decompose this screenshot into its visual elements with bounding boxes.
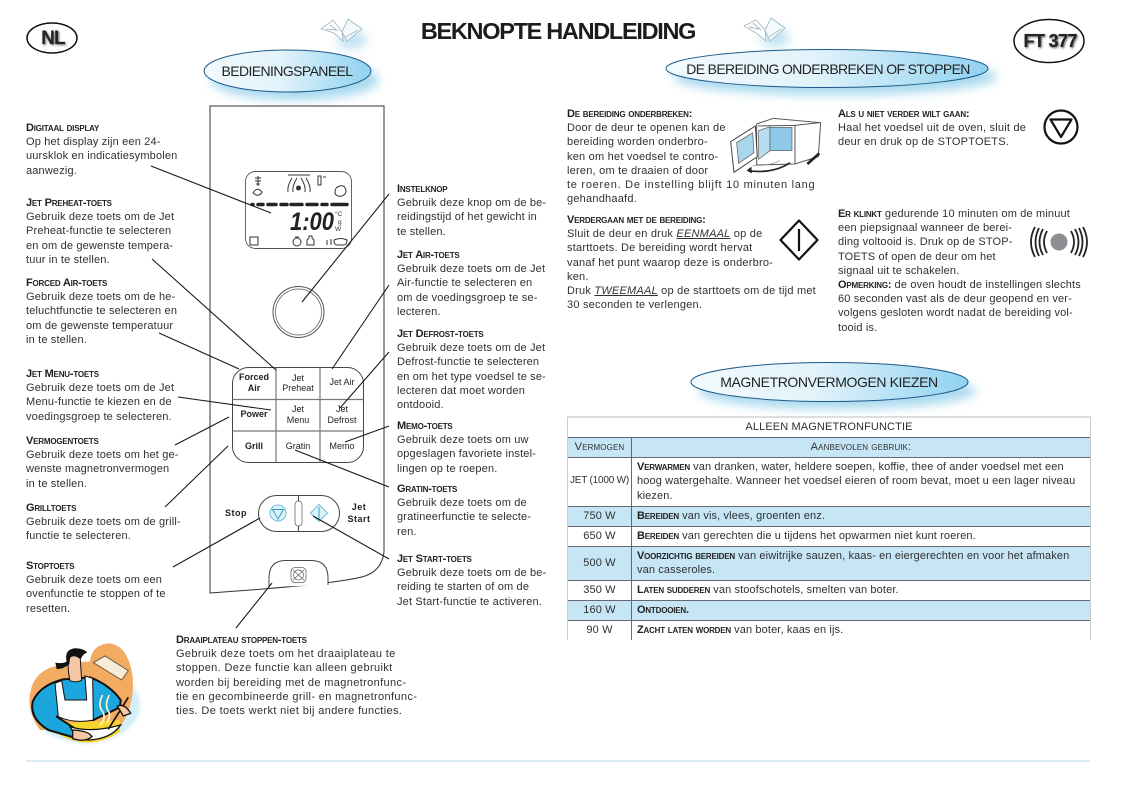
button grid: Memo: [329, 441, 355, 451]
text: jet preheat: Gebruik deze toets om de Jet: [26, 211, 174, 223]
text: de bereiding onderbreken: De bereiding onderbreken:: [567, 108, 692, 120]
text: er klinkt: signaal uit te schakelen.: [838, 265, 959, 277]
text: grill: functie te selecteren.: [26, 530, 131, 542]
table: magnetronvermogen: 160 W: [583, 604, 616, 616]
text: jet preheat: Preheat-functie te selecteren: [26, 225, 171, 237]
text: jet defrost: [397, 328, 546, 411]
text: als u niet verder wilt gaan: Als u niet verder wilt gaan:: [838, 108, 969, 120]
text: forced air: in te stellen.: [26, 334, 87, 346]
LCD digits: 1:00: [290, 208, 334, 236]
text: digitaal display: [26, 122, 177, 177]
text: draaiplateau: [176, 634, 417, 717]
LCD units: °C: [335, 210, 343, 218]
text: er klinkt: Er klinkt gedurende 10 minuten om de minuut: [838, 208, 1070, 220]
table: magnetronvermogen: Ontdooien.: [637, 604, 689, 616]
text: verdergaan: Verdergaan met de bereiding:: [567, 214, 706, 226]
text: jet menu: Jet Menu-toets: [26, 368, 99, 380]
text: digitaal display: Digitaal display: [26, 122, 99, 134]
text: stop: resetten.: [26, 603, 70, 615]
text: digitaal display: uursklok en indicatiesymbolen: [26, 150, 177, 162]
button grid: Gratin: [286, 441, 310, 451]
text: gratin: Gebruik deze toets om de: [397, 497, 527, 509]
text: draaiplateau: Draaiplateau stoppen-toets: [176, 634, 307, 646]
button grid: Air: [248, 383, 261, 393]
table: magnetronvermogen: van casseroles.: [637, 564, 715, 576]
text: de bereiding onderbreken: Door de deur te openen kan de: [567, 122, 726, 134]
heading pill: Bedieningspaneel: BEDIENINGSPANEEL: [222, 63, 353, 79]
text: er klinkt: [838, 208, 1081, 334]
icon: stop circle: [1044, 110, 1078, 144]
text: draaiplateau: tie en gecombineerde grill- en magnetronfunc-: [176, 691, 417, 703]
text: jet defrost: Defrost-functie te selecteren: [397, 356, 539, 368]
text: jet preheat: [26, 197, 174, 266]
title: BEKNOPTE HANDLEIDING: [421, 18, 695, 44]
text: er klinkt: Opmerking: de oven houdt de instellingen slechts: [838, 279, 1081, 291]
text: gratin: Gratin-toets: [397, 483, 457, 495]
text: jet start: Jet Start-functie te activeren.: [397, 596, 542, 608]
text: jet air: Jet Air-toets: [397, 249, 460, 261]
icon: start diamond: [780, 220, 818, 260]
text: instelknop: [397, 183, 546, 238]
text: jet defrost: Gebruik deze toets om de Jet: [397, 342, 545, 354]
stop and start buttons: Jet: [352, 502, 366, 512]
illustration: open microwave: [731, 118, 821, 173]
text: vermogen: Gebruik deze toets om het ge-: [26, 449, 179, 461]
LCD display: [246, 172, 352, 248]
icon: open book left: [321, 19, 367, 49]
text: verdergaan: starttoets. De bereiding wordt hervat: [567, 242, 752, 254]
stop and start buttons: Stop: [225, 508, 247, 518]
heading pill: De bereiding onderbreken of stoppen: [666, 50, 997, 95]
text: jet defrost: en om het type voedsel te se-: [397, 371, 546, 383]
text: jet start: Gebruik deze toets om de be-: [397, 567, 546, 579]
footer rule: [26, 760, 1090, 762]
table: magnetronvermogen: Aanbevolen gebruik:: [811, 441, 911, 453]
badge: FT 377: FT 377: [1023, 30, 1077, 51]
table: magnetronvermogen: Vermogen: [575, 441, 624, 453]
button grid: Forced: [239, 372, 269, 382]
text: jet preheat: Jet Preheat-toets: [26, 197, 112, 209]
illustration: chef stirring: [29, 643, 140, 743]
button grid: Jet: [292, 373, 304, 383]
text: forced air: om de gewenste temperatuur: [26, 320, 173, 332]
text: grill: [26, 502, 181, 542]
text: verdergaan: Druk TWEEMAAL op de starttoets om de tijd met: [567, 285, 816, 297]
table: magnetronvermogen: Bereiden van gerechten die u tijdens het opwarmen niet kunt roeren.: [637, 530, 976, 542]
text: verdergaan: Sluit de deur en druk EENMAAL op de: [567, 228, 762, 240]
text: forced air: teluchtfunctie te selecteren en: [26, 305, 177, 317]
table: magnetronvermogen: JET (1000 W): [570, 475, 629, 486]
table: magnetronvermogen: 350 W: [583, 584, 616, 596]
text: forced air: Gebruik deze toets om de he-: [26, 291, 175, 303]
text: gratin: [397, 483, 531, 538]
text: instelknop: reidingstijd of het gewicht in: [397, 211, 537, 223]
text: digitaal display: Op het display zijn een 24-: [26, 136, 161, 148]
text: draaiplateau: stoppen. Deze functie kan alleen gebruikt: [176, 662, 393, 674]
table: magnetronvermogen: 500 W: [583, 557, 616, 569]
table: magnetronvermogen: 750 W: [583, 510, 616, 522]
text: verdergaan: vanaf het punt waarop deze is onderbro-: [567, 257, 773, 269]
text: de bereiding onderbreken: gehandhaafd.: [567, 193, 637, 205]
table: magnetronvermogen: 650 W: [583, 530, 616, 542]
text: vermogen: in te stellen.: [26, 478, 87, 490]
text: gratin: ren.: [397, 526, 417, 538]
text: memo: lingen op te roepen.: [397, 463, 497, 475]
button grid: Power: [240, 409, 268, 419]
button grid: Defrost: [327, 415, 357, 425]
text: de bereiding onderbreken: leren, om te draaien of door: [567, 165, 708, 177]
text: verdergaan: 30 seconden te verlengen.: [567, 299, 702, 311]
text: jet start: [397, 553, 546, 608]
text: verdergaan: ken.: [567, 271, 589, 283]
text: als u niet verder wilt gaan: deur en druk op de STOPTOETS.: [838, 136, 1009, 148]
text: er klinkt: volgens gesloten wordt nadat de bereiding vol-: [838, 307, 1073, 319]
button grid: Preheat: [282, 383, 314, 393]
text: grill: Gebruik deze toets om de grill-: [26, 516, 181, 528]
text: de bereiding onderbreken: te roeren. De instelling blijft 10 minuten lang: [567, 179, 815, 191]
text: er klinkt: ding voltooid is. Druk op de STOP-: [838, 236, 1013, 248]
text: jet defrost: Jet Defrost-toets: [397, 328, 484, 340]
button grid: Jet Air: [329, 377, 355, 387]
icon: beep signal: [1031, 227, 1087, 257]
text: stop: ovenfunctie te stoppen of te: [26, 588, 166, 600]
text: er klinkt: TOETS of open de deur om het: [838, 251, 996, 263]
text: vermogen: [26, 435, 179, 490]
badge: NL: NL: [42, 29, 67, 50]
table: magnetronvermogen: Bereiden van vis, vlees, groenten enz.: [637, 510, 825, 522]
heading pill: Bedieningspaneel: [204, 50, 379, 100]
text: er klinkt: tooid is.: [838, 322, 877, 334]
text: draaiplateau: worden bij bereiding met de magnetronfunc-: [176, 677, 406, 689]
text: draaiplateau: ties. De toets werkt niet bij andere functies.: [176, 705, 402, 717]
text: stop: Gebruik deze toets om een: [26, 574, 162, 586]
text: jet air: [397, 249, 545, 318]
text: instelknop: Gebruik deze knop om de be-: [397, 197, 546, 209]
dial: [273, 286, 324, 338]
stop and start buttons: Start: [347, 514, 371, 524]
table: magnetronvermogen: 90 W: [586, 624, 613, 636]
text: jet preheat: tuur in te stellen.: [26, 254, 110, 266]
button grid: Jet: [292, 404, 304, 414]
text: verdergaan: [567, 214, 816, 311]
table: magnetronvermogen: ALLEEN MAGNETRONFUNCTIE: [745, 421, 913, 433]
table: magnetronvermogen: Laten sudderen van stoofschotels, smelten van boter.: [637, 584, 899, 596]
text: jet menu: Menu-functie te kiezen en de: [26, 396, 172, 408]
text: jet start: reiding te starten of om de: [397, 581, 529, 593]
heading pill: Magnetronvermogen kiezen: MAGNETRONVERMOGEN KIEZEN: [720, 374, 938, 390]
icon: open book right: [744, 18, 790, 47]
text: jet air: Air-functie te selecteren en: [397, 277, 532, 289]
text: jet menu: voedingsgroep te selecteren.: [26, 411, 172, 423]
table: magnetronvermogen: hoog watergehalte. Wanneer het voedsel eieren of room bevat, moet u een lager niveau: [637, 475, 1075, 487]
text: jet menu: [26, 368, 174, 423]
LCD units: W: [335, 226, 342, 233]
text: jet start: Jet Start-toets: [397, 553, 472, 565]
text: draaiplateau: Gebruik deze toets om het draaiplateau te: [176, 648, 396, 660]
text: jet air: om de voedingsgroep te se-: [397, 292, 538, 304]
text: jet air: Gebruik deze toets om de Jet: [397, 263, 545, 275]
table: magnetronvermogen: [567, 416, 1091, 640]
text: jet air: lecteren.: [397, 306, 441, 318]
text: instelknop: te stellen.: [397, 226, 446, 238]
text: de bereiding onderbreken: ken om het voedsel te contro-: [567, 151, 718, 163]
button grid: Jet: [336, 404, 348, 414]
text: als u niet verder wilt gaan: [838, 108, 1026, 148]
badge: NL: NL: [41, 28, 66, 49]
badge: FT 377: FT 377: [1024, 31, 1078, 52]
badge: FT 377: [1014, 20, 1084, 62]
text: de bereiding onderbreken: bereiding worden onderbro-: [567, 136, 708, 148]
button grid: Menu: [287, 415, 309, 425]
text: jet defrost: ontdooid.: [397, 399, 444, 411]
text: stop: [26, 560, 166, 615]
table: magnetronvermogen: kiezen.: [637, 490, 673, 502]
turntable stop button: [269, 560, 328, 587]
badge: NL: [27, 23, 77, 53]
text: jet menu: Gebruik deze toets om de Jet: [26, 382, 174, 394]
text: forced air: Forced Air-toets: [26, 277, 107, 289]
stop and start buttons: [225, 496, 371, 532]
table: magnetronvermogen: Voorzichtig bereiden van eiwitrijke sauzen, kaas- en eiergerechten en voor het afmaken: [637, 550, 1069, 562]
text: memo: [397, 420, 536, 475]
text: vermogen: wenste magnetronvermogen: [26, 463, 169, 475]
LCD units: [335, 210, 343, 233]
text: memo: Memo-toets: [397, 420, 453, 432]
text: de bereiding onderbreken: [567, 108, 815, 205]
table: magnetronvermogen: Verwarmen van dranken, water, heldere soepen, koffie, thee of ander voedsel met een: [637, 461, 1064, 473]
text: als u niet verder wilt gaan: Haal het voedsel uit de oven, sluit de: [838, 122, 1026, 134]
text: er klinkt: een piepsignaal wanneer de berei-: [838, 222, 1012, 234]
text: memo: opgeslagen favoriete instel-: [397, 448, 536, 460]
button grid: Grill: [245, 441, 263, 451]
text: forced air: [26, 277, 177, 346]
text: digitaal display: aanwezig.: [26, 165, 77, 177]
heading pill: De bereiding onderbreken of stoppen: DE BEREIDING ONDERBREKEN OF STOPPEN: [686, 61, 970, 77]
text: er klinkt: 60 seconden vast als de deur geopend en ver-: [838, 293, 1072, 305]
panel: microwave control panel: [210, 106, 384, 593]
text: jet preheat: en om de gewenste tempera-: [26, 240, 173, 252]
text: stop: Stoptoets: [26, 560, 74, 572]
text: instelknop: Instelknop: [397, 183, 447, 195]
LCD units: g: [338, 219, 342, 226]
text: gratin: gratineerfunctie te selecte-: [397, 511, 531, 523]
leader lines: [151, 166, 389, 628]
text: memo: Gebruik deze toets om uw: [397, 434, 529, 446]
button grid: [232, 368, 364, 462]
text: vermogen: Vermogentoets: [26, 435, 99, 447]
text: grill: Grilltoets: [26, 502, 76, 514]
table: magnetronvermogen: Zacht laten worden van boter, kaas en ijs.: [637, 624, 843, 636]
text: jet defrost: lecteren dat moet worden: [397, 385, 525, 397]
heading pill: Magnetronvermogen kiezen: [691, 362, 976, 409]
